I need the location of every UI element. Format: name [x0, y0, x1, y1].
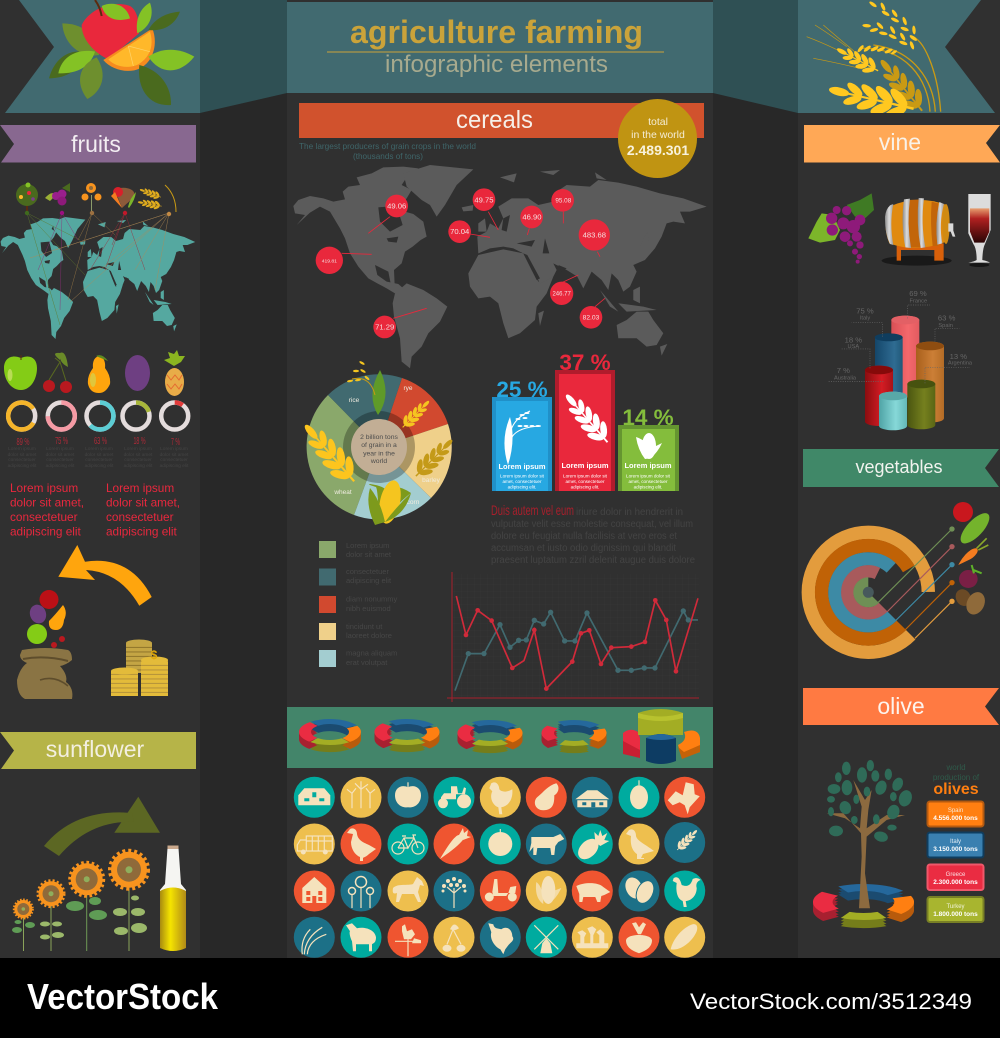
total callout: total [648, 116, 668, 128]
map caption: (thousands of tons) [353, 151, 423, 161]
red text left: Lorem ipsum [10, 481, 78, 495]
icon: corn [526, 870, 567, 912]
red text right: adipiscing elit [106, 524, 178, 538]
icon: plum [125, 355, 150, 391]
legend: dolor sit amet [346, 550, 392, 559]
chart: 3D cylinders: USA [848, 344, 859, 350]
icon: sheep [340, 917, 382, 958]
red text left: dolor sit amet, [10, 496, 84, 510]
bar: 25 percent: amet, consectetuer [502, 479, 542, 484]
chart connectors [878, 526, 955, 638]
donut captions: Lorem ipsum [85, 446, 113, 452]
tag: Italy [928, 832, 984, 858]
chart: 3D cylinders: 63 % [938, 314, 956, 323]
map markers: 46.90 [522, 213, 542, 222]
icon: pear [88, 355, 110, 393]
panel: icon grid [294, 777, 705, 958]
legend: diam nonummy [346, 594, 398, 604]
heading: cereals: cereals [456, 106, 533, 134]
icon: chicken [480, 777, 521, 818]
footer [0, 958, 1000, 1038]
bar: 25 percent: Lorem ipsum [498, 462, 546, 471]
map markers: 95.08 [555, 198, 572, 205]
banner: cereals [299, 103, 704, 138]
heading: olive: olive [877, 693, 925, 719]
tag: Italy: 3.150.000 tons [933, 846, 978, 853]
ribbon fold left [200, 0, 287, 113]
chart: 3D cylinders: Australia [834, 376, 857, 382]
icon: farm plants [572, 917, 613, 958]
donut 3 [453, 718, 527, 755]
icon: pineapple [572, 824, 613, 864]
bar: 14 percent: 14 % [622, 405, 674, 430]
chart: 3D cylinders: France [910, 298, 927, 304]
pie chart: grain types: of grain in a [361, 442, 397, 449]
footer brand: VectorStock [27, 976, 219, 1017]
chart: 3D cylinders: Italy [860, 316, 870, 322]
panel: cereals [293, 99, 707, 702]
ribbon fold right [713, 0, 798, 113]
bar: 25 percent: 25 % [496, 377, 548, 402]
donut captions: dolor sit amet [46, 452, 75, 458]
subtitle: infographic elements [385, 51, 608, 78]
icon: green apple [4, 355, 37, 390]
tag: Italy: Italy [950, 839, 961, 845]
line chart [447, 572, 699, 702]
total callout: in the world [631, 129, 685, 141]
icon: potatoes [618, 870, 660, 912]
tag: Spain: Spain [948, 808, 963, 814]
icon: windmill [526, 917, 567, 958]
heading: fruits: fruits [71, 131, 121, 157]
icon: fruit tree [16, 182, 38, 215]
map markers: 70.04 [450, 227, 470, 236]
map markers: 246.77 [552, 292, 571, 298]
legend: consectetuer [346, 567, 389, 576]
donut charts: fruit shares [3, 398, 188, 434]
panel: vine [804, 125, 1000, 430]
donut percentages [16, 436, 180, 448]
caption: world production of olives: olives [933, 781, 979, 798]
legend: adipiscing elit [346, 576, 392, 585]
tag: Spain: 4.556.000 tons [933, 815, 978, 822]
icon: pear [526, 777, 567, 818]
icon: bicycle [388, 824, 428, 864]
chart: concentric rings [783, 507, 953, 677]
legend: tincidunt ut [346, 622, 383, 631]
icon: apple [388, 777, 428, 818]
donut 2 [370, 717, 444, 754]
bar: 37 percent: Lorem ipsum [561, 461, 609, 470]
map markers: 82.03 [583, 315, 600, 322]
title panel [287, 0, 713, 93]
icon: sunflowers [340, 870, 382, 912]
bar: 25 percent: Lorem ipsum dolor sit [500, 474, 545, 478]
donut percentages: 7 % [171, 437, 180, 448]
pie chart: grain types: rice [349, 397, 360, 404]
bar: 37 percent: Lorem ipsum dolor sit [563, 474, 608, 478]
donut captions: Lorem ipsum [160, 446, 188, 452]
donut captions: adipiscing elit [85, 463, 114, 469]
donut captions [8, 446, 189, 469]
donut 1 [295, 717, 365, 754]
icon: farmhouse [294, 870, 335, 912]
icon: duck [618, 824, 660, 864]
pie chart: grain types: world [370, 458, 387, 465]
pie chart: grain types: year in the [363, 450, 395, 458]
bar: 14 percent: adipiscing elit. [634, 484, 662, 490]
right dark column [713, 0, 798, 958]
donut captions: Lorem ipsum [46, 446, 74, 452]
bar: 25 percent [492, 377, 552, 491]
donut captions: Lorem ipsum [8, 446, 36, 452]
red text right: dolor sit amet, [106, 496, 180, 510]
banner: vegetables [803, 449, 999, 487]
icon: tallest sunflower [111, 852, 147, 951]
legend [319, 541, 398, 667]
donut captions: adipiscing elit [46, 463, 75, 469]
icon: scooter [480, 870, 521, 912]
tag: Greece: 2.300.000 tons [933, 879, 978, 886]
ribbon left [5, 0, 200, 113]
red text right: consectetuer [106, 510, 174, 524]
donut captions: consectetuer [46, 457, 74, 463]
icon: farm building [572, 777, 613, 818]
icon: oil bottle [160, 846, 186, 951]
map: world teal [1, 217, 195, 339]
chart: 3D cylinders: Spain [938, 323, 953, 329]
tag: Greece [928, 864, 984, 890]
icon: cherries [43, 353, 72, 393]
icon: plum [618, 777, 660, 818]
panel: olive [803, 688, 999, 930]
bar: 14 percent: amet, consectetuer [628, 479, 668, 484]
left dark column [200, 0, 287, 958]
chart: 3D cylinders: 13 % [950, 352, 967, 361]
tag: Greece: Greece [946, 872, 966, 878]
icon: grapes [808, 193, 874, 264]
strip background [287, 707, 713, 768]
legend: erat volutpat [346, 658, 388, 667]
pie chart: grain types: barley [422, 477, 441, 484]
icon: round fruit [480, 824, 521, 864]
panel: 3D donut strip [287, 707, 713, 768]
icon: sunflowers small [82, 183, 102, 215]
donut captions: dolor sit amet [8, 452, 37, 458]
icon: medium sunflower [38, 881, 64, 951]
map markers: 49.06 [387, 202, 406, 211]
icon: barn [294, 777, 335, 818]
arrow: olive [44, 797, 160, 856]
footer url: VectorStock.com/3512349 [690, 989, 972, 1014]
caption: world production of olives [933, 763, 980, 798]
header: title block [287, 0, 713, 93]
chart: 3D cylinders: 75 % [856, 307, 874, 316]
donut 5: exploded [623, 709, 700, 764]
legend: Lorem ipsum [346, 541, 389, 550]
footer bar [0, 958, 1000, 1038]
icon: pig [572, 870, 613, 912]
donut captions: consectetuer [124, 457, 152, 463]
legend: magna aliquam [346, 648, 397, 658]
map markers: 71.29 [375, 323, 394, 332]
icon: radish [618, 917, 660, 958]
icon: truck [294, 824, 335, 864]
caption: world production of olives: production of [933, 773, 980, 782]
text block: Duis autem: praesent luptatum zzril delenit augue duis dolore [491, 555, 695, 566]
donut captions: dolor sit amet [85, 452, 114, 458]
connection lines [27, 213, 169, 325]
text block: Duis autem: accumsan et iusto odio dignissim qui blandit [491, 543, 676, 554]
icon: gold coins: $ [151, 648, 158, 662]
donut 4 [537, 718, 611, 755]
icon: vegetables [953, 502, 994, 618]
total callout: 2.489.301 [627, 142, 689, 158]
text block: Duis autem [491, 502, 695, 566]
donut percentages: 89 % [16, 437, 30, 448]
donut captions: dolor sit amet [124, 452, 153, 458]
total callout [618, 99, 697, 178]
map caption: The largest producers of grain crops in the world [299, 141, 476, 151]
banner: fruits [0, 125, 196, 162]
ribbon right [798, 0, 995, 113]
icon: wheat small [137, 185, 176, 216]
panel: vegetables [783, 449, 999, 677]
donut percentages: 63 % [94, 436, 107, 447]
tag: Spain [928, 802, 984, 826]
icon: wheat badge [664, 822, 705, 863]
map markers: 49.75 [474, 195, 494, 204]
map markers: 483.68 [583, 231, 606, 240]
chart: 3D cylinders: 7 % [837, 366, 850, 375]
icon: pineapple [164, 350, 185, 396]
bar: 14 percent: Lorem ipsum [624, 461, 672, 470]
legend: nibh euismod [346, 604, 391, 613]
map markers [316, 188, 610, 338]
icon: cow [526, 824, 567, 864]
title: agriculture farming [350, 14, 643, 50]
pie chart: grain types: wheat [333, 489, 352, 496]
icon: wine glass [968, 194, 991, 267]
icon: large sunflower [66, 863, 107, 951]
map markers: 419.81 [322, 258, 337, 264]
bar: 14 percent [618, 405, 679, 491]
bar: 37 percent: 37 % [559, 350, 611, 375]
heading: vine: vine [879, 129, 921, 155]
text block: Duis autem: Duis autem vel eum [491, 502, 574, 518]
map: world grey [293, 165, 707, 368]
heading: sunflower: sunflower [46, 736, 145, 762]
icon: grapes [664, 777, 705, 818]
text block: Duis autem: vulputate velit esse molestie consequat, vel illum [491, 519, 693, 530]
donut captions: adipiscing elit [160, 463, 189, 469]
icon: wheat [807, 0, 941, 126]
icon: tree [434, 870, 474, 912]
pie chart: grain types: corn [407, 499, 420, 506]
header: right ribbon with wheat [713, 0, 995, 126]
pie chart: grain types [294, 360, 460, 526]
tag: Turkey: Turkey [946, 904, 965, 910]
icon: barrel [882, 198, 955, 266]
icon: sack of fruit [17, 590, 72, 699]
chart: 3D cylinders: Argentina [948, 361, 973, 367]
bar: 37 percent: amet, consectetuer [565, 479, 605, 484]
icon: horse [388, 870, 428, 912]
icon: olive tree [827, 760, 914, 908]
banner: olive [803, 688, 999, 725]
donut captions: dolor sit amet [160, 452, 189, 458]
tag: Turkey [928, 897, 984, 922]
bar: 37 percent: adipiscing elit. [571, 484, 599, 490]
icon: gold coins [111, 640, 168, 696]
chart: 3D cylinders: 69 % [909, 289, 927, 298]
icon: cherries [434, 917, 474, 958]
donut captions: Lorem ipsum [124, 446, 152, 452]
donut percentages: 18 % [134, 436, 146, 447]
panel: sunflower [0, 732, 196, 951]
icon: grapes small [45, 183, 70, 215]
caption: world production of olives: world [945, 763, 966, 772]
icon: tractor [434, 777, 474, 818]
banner: vine [804, 125, 1000, 162]
red text right: Lorem ipsum [106, 481, 174, 495]
chart: 3D cylinders: 18 % [845, 336, 862, 345]
olive donut [806, 882, 921, 930]
tag: Turkey: 1.800.000 tons [933, 911, 978, 918]
icon: weather vane [388, 917, 428, 958]
icon: turkey [480, 917, 521, 958]
icon: vegetables small [111, 187, 136, 215]
icon: rooster [664, 870, 705, 912]
icon: small sunflower [12, 900, 35, 951]
bar: 37 percent [555, 350, 617, 491]
legend: laoreet dolore [346, 631, 392, 640]
bar: 14 percent: Lorem ipsum dolor sit [626, 474, 671, 478]
donut captions: consectetuer [85, 457, 113, 463]
icon: cucumber [664, 917, 705, 958]
bar: 25 percent: adipiscing elit. [508, 484, 536, 490]
header: left ribbon with fruit [5, 0, 287, 113]
red text left: adipiscing elit [10, 524, 82, 538]
heading: vegetables: vegetables [855, 457, 943, 477]
icon: rice [294, 917, 335, 958]
pie chart: grain types: 2 billion tons [360, 434, 398, 441]
icon: carrot [434, 824, 474, 864]
donut captions: consectetuer [160, 457, 188, 463]
icon: apple and orange with leaves [49, 0, 194, 105]
pie chart: grain types: rye [403, 385, 413, 392]
text block: Duis autem: iriure dolor in hendrerit in [576, 507, 683, 518]
red text left: consectetuer [10, 510, 78, 524]
text block: Duis autem: dolore eu feugiat nulla facilisis at vero eros et [491, 531, 677, 542]
donut captions: consectetuer [8, 457, 36, 463]
icon: wind turbines [340, 777, 382, 818]
donut captions: adipiscing elit [124, 463, 153, 469]
arrow: orange [58, 545, 152, 606]
chart: 3D cylinders [828, 289, 973, 430]
panel: fruits [0, 125, 196, 699]
donut percentages: 75 % [55, 436, 68, 447]
banner: sunflower [0, 732, 196, 769]
donut captions: adipiscing elit [8, 463, 37, 469]
icon: goose [340, 824, 382, 864]
